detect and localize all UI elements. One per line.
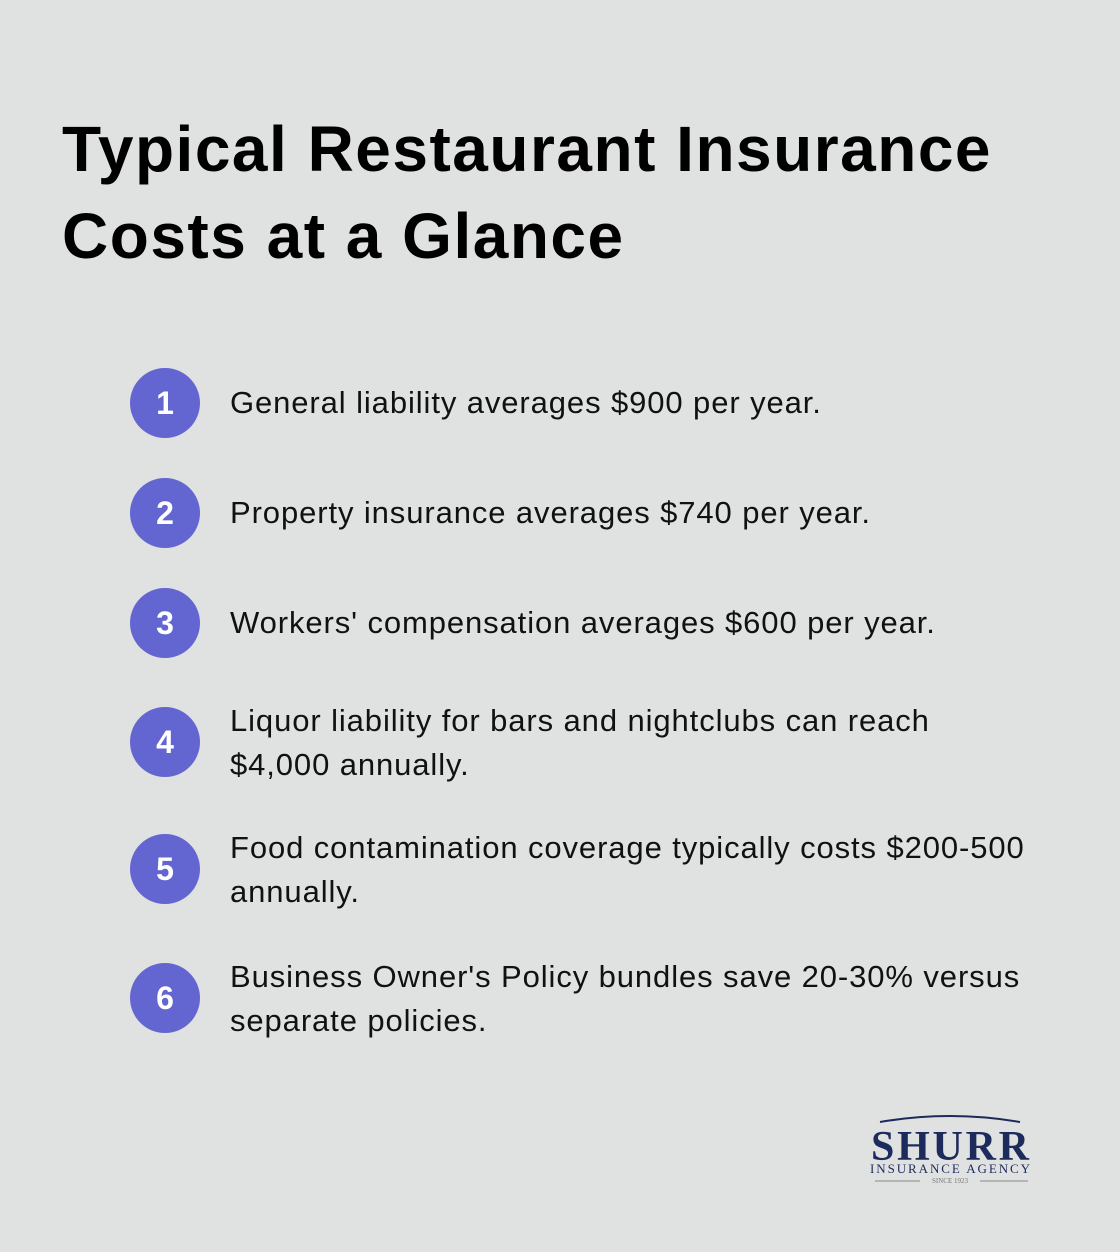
logo: SINCE 1923 xyxy=(932,1177,968,1185)
item 6 xyxy=(130,959,1020,1038)
item 3: 3 xyxy=(156,605,174,641)
title: Costs at a Glance xyxy=(62,200,625,272)
item 6: 6 xyxy=(156,980,174,1016)
item 4: 4 xyxy=(156,724,174,760)
item 1: 1 xyxy=(156,385,174,421)
item 1 xyxy=(130,368,822,438)
item 4 xyxy=(130,703,930,782)
item 4: $4,000 annually. xyxy=(230,747,470,782)
item 5: 5 xyxy=(156,851,174,887)
logo xyxy=(870,1115,1031,1185)
item 6: separate policies. xyxy=(230,1003,487,1038)
item 5: Food contamination coverage typically costs $200-500 xyxy=(230,830,1025,865)
item 2 xyxy=(130,478,871,548)
logo: SHURR xyxy=(871,1124,1030,1170)
item 2: 2 xyxy=(156,495,174,531)
item 5 xyxy=(130,830,1025,909)
item 3: Workers' compensation averages $600 per year. xyxy=(230,605,936,640)
item 5: annually. xyxy=(230,874,360,909)
item 4: Liquor liability for bars and nightclubs can reach xyxy=(230,703,930,738)
item 6: Business Owner's Policy bundles save 20-30% versus xyxy=(230,959,1020,994)
title: Typical Restaurant Insurance xyxy=(62,113,992,185)
title xyxy=(62,113,992,272)
logo: INSURANCE AGENCY xyxy=(870,1161,1031,1176)
item 3 xyxy=(130,588,936,658)
item 1: General liability averages $900 per year. xyxy=(230,385,822,420)
item 2: Property insurance averages $740 per year. xyxy=(230,495,871,530)
